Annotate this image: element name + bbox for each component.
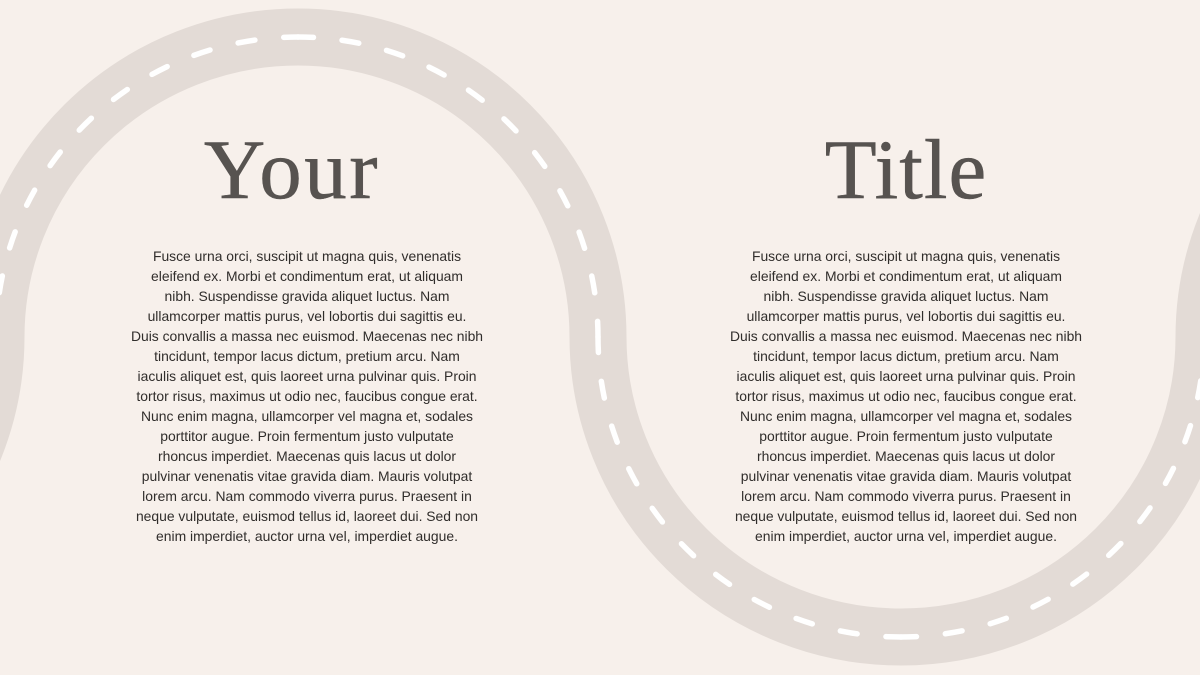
heading: Your: Your <box>204 123 380 217</box>
text block: right column: enim imperdiet, auctor urna vel, imperdiet augue. <box>755 528 1057 544</box>
text block: left column: eleifend ex. Morbi et condimentum erat, ut aliquam <box>151 268 463 284</box>
text block: right column: tincidunt, tempor lacus dictum, pretium arcu. Nam <box>753 348 1059 364</box>
text block: left column: ullamcorper mattis purus, vel lobortis dui sagittis eu. <box>148 308 466 324</box>
text block: left column: iaculis aliquet est, quis laoreet urna pulvinar quis. Proin <box>138 368 476 384</box>
text block: left column: tincidunt, tempor lacus dictum, pretium arcu. Nam <box>154 348 460 364</box>
text block: right column: rhoncus imperdiet. Maecenas quis lacus ut dolor <box>757 448 1055 464</box>
text block: left column: enim imperdiet, auctor urna vel, imperdiet augue. <box>156 528 458 544</box>
heading: Title: Title <box>825 123 987 217</box>
text block: left column: tortor risus, maximus ut odio nec, faucibus congue erat. <box>136 388 478 404</box>
text block: right column: ullamcorper mattis purus, vel lobortis dui sagittis eu. <box>747 308 1065 324</box>
text block: right column: Duis convallis a massa nec euismod. Maecenas nec nibh <box>730 328 1082 344</box>
text block: right column: lorem arcu. Nam commodo viverra purus. Praesent in <box>741 488 1071 504</box>
text block: left column: Nunc enim magna, ullamcorper vel magna et, sodales <box>141 408 473 424</box>
text block: right column: eleifend ex. Morbi et condimentum erat, ut aliquam <box>750 268 1062 284</box>
text block: left column: rhoncus imperdiet. Maecenas quis lacus ut dolor <box>158 448 456 464</box>
text block: left column <box>131 248 483 544</box>
text block: left column: lorem arcu. Nam commodo viverra purus. Praesent in <box>142 488 472 504</box>
text block: right column: tortor risus, maximus ut odio nec, faucibus congue erat. <box>735 388 1077 404</box>
text block: right column <box>730 248 1082 544</box>
text block: right column: Nunc enim magna, ullamcorper vel magna et, sodales <box>740 408 1072 424</box>
text block: left column: pulvinar venenatis vitae gravida diam. Mauris volutpat <box>142 468 472 484</box>
text block: left column: porttitor augue. Proin fermentum justo vulputate <box>160 428 454 444</box>
text block: right column: iaculis aliquet est, quis laoreet urna pulvinar quis. Proin <box>737 368 1075 384</box>
text block: left column: nibh. Suspendisse gravida aliquet luctus. Nam <box>165 288 449 304</box>
text block: right column: pulvinar venenatis vitae gravida diam. Mauris volutpat <box>741 468 1071 484</box>
text block: right column: neque vulputate, euismod tellus id, laoreet dui. Sed non <box>735 508 1077 524</box>
text block: left column: neque vulputate, euismod tellus id, laoreet dui. Sed non <box>136 508 478 524</box>
text block: right column: Fusce urna orci, suscipit ut magna quis, venenatis <box>752 248 1060 264</box>
text block: left column: Duis convallis a massa nec euismod. Maecenas nec nibh <box>131 328 483 344</box>
text block: left column: Fusce urna orci, suscipit ut magna quis, venenatis <box>153 248 461 264</box>
text block: right column: nibh. Suspendisse gravida aliquet luctus. Nam <box>764 288 1048 304</box>
text block: right column: porttitor augue. Proin fermentum justo vulputate <box>759 428 1053 444</box>
